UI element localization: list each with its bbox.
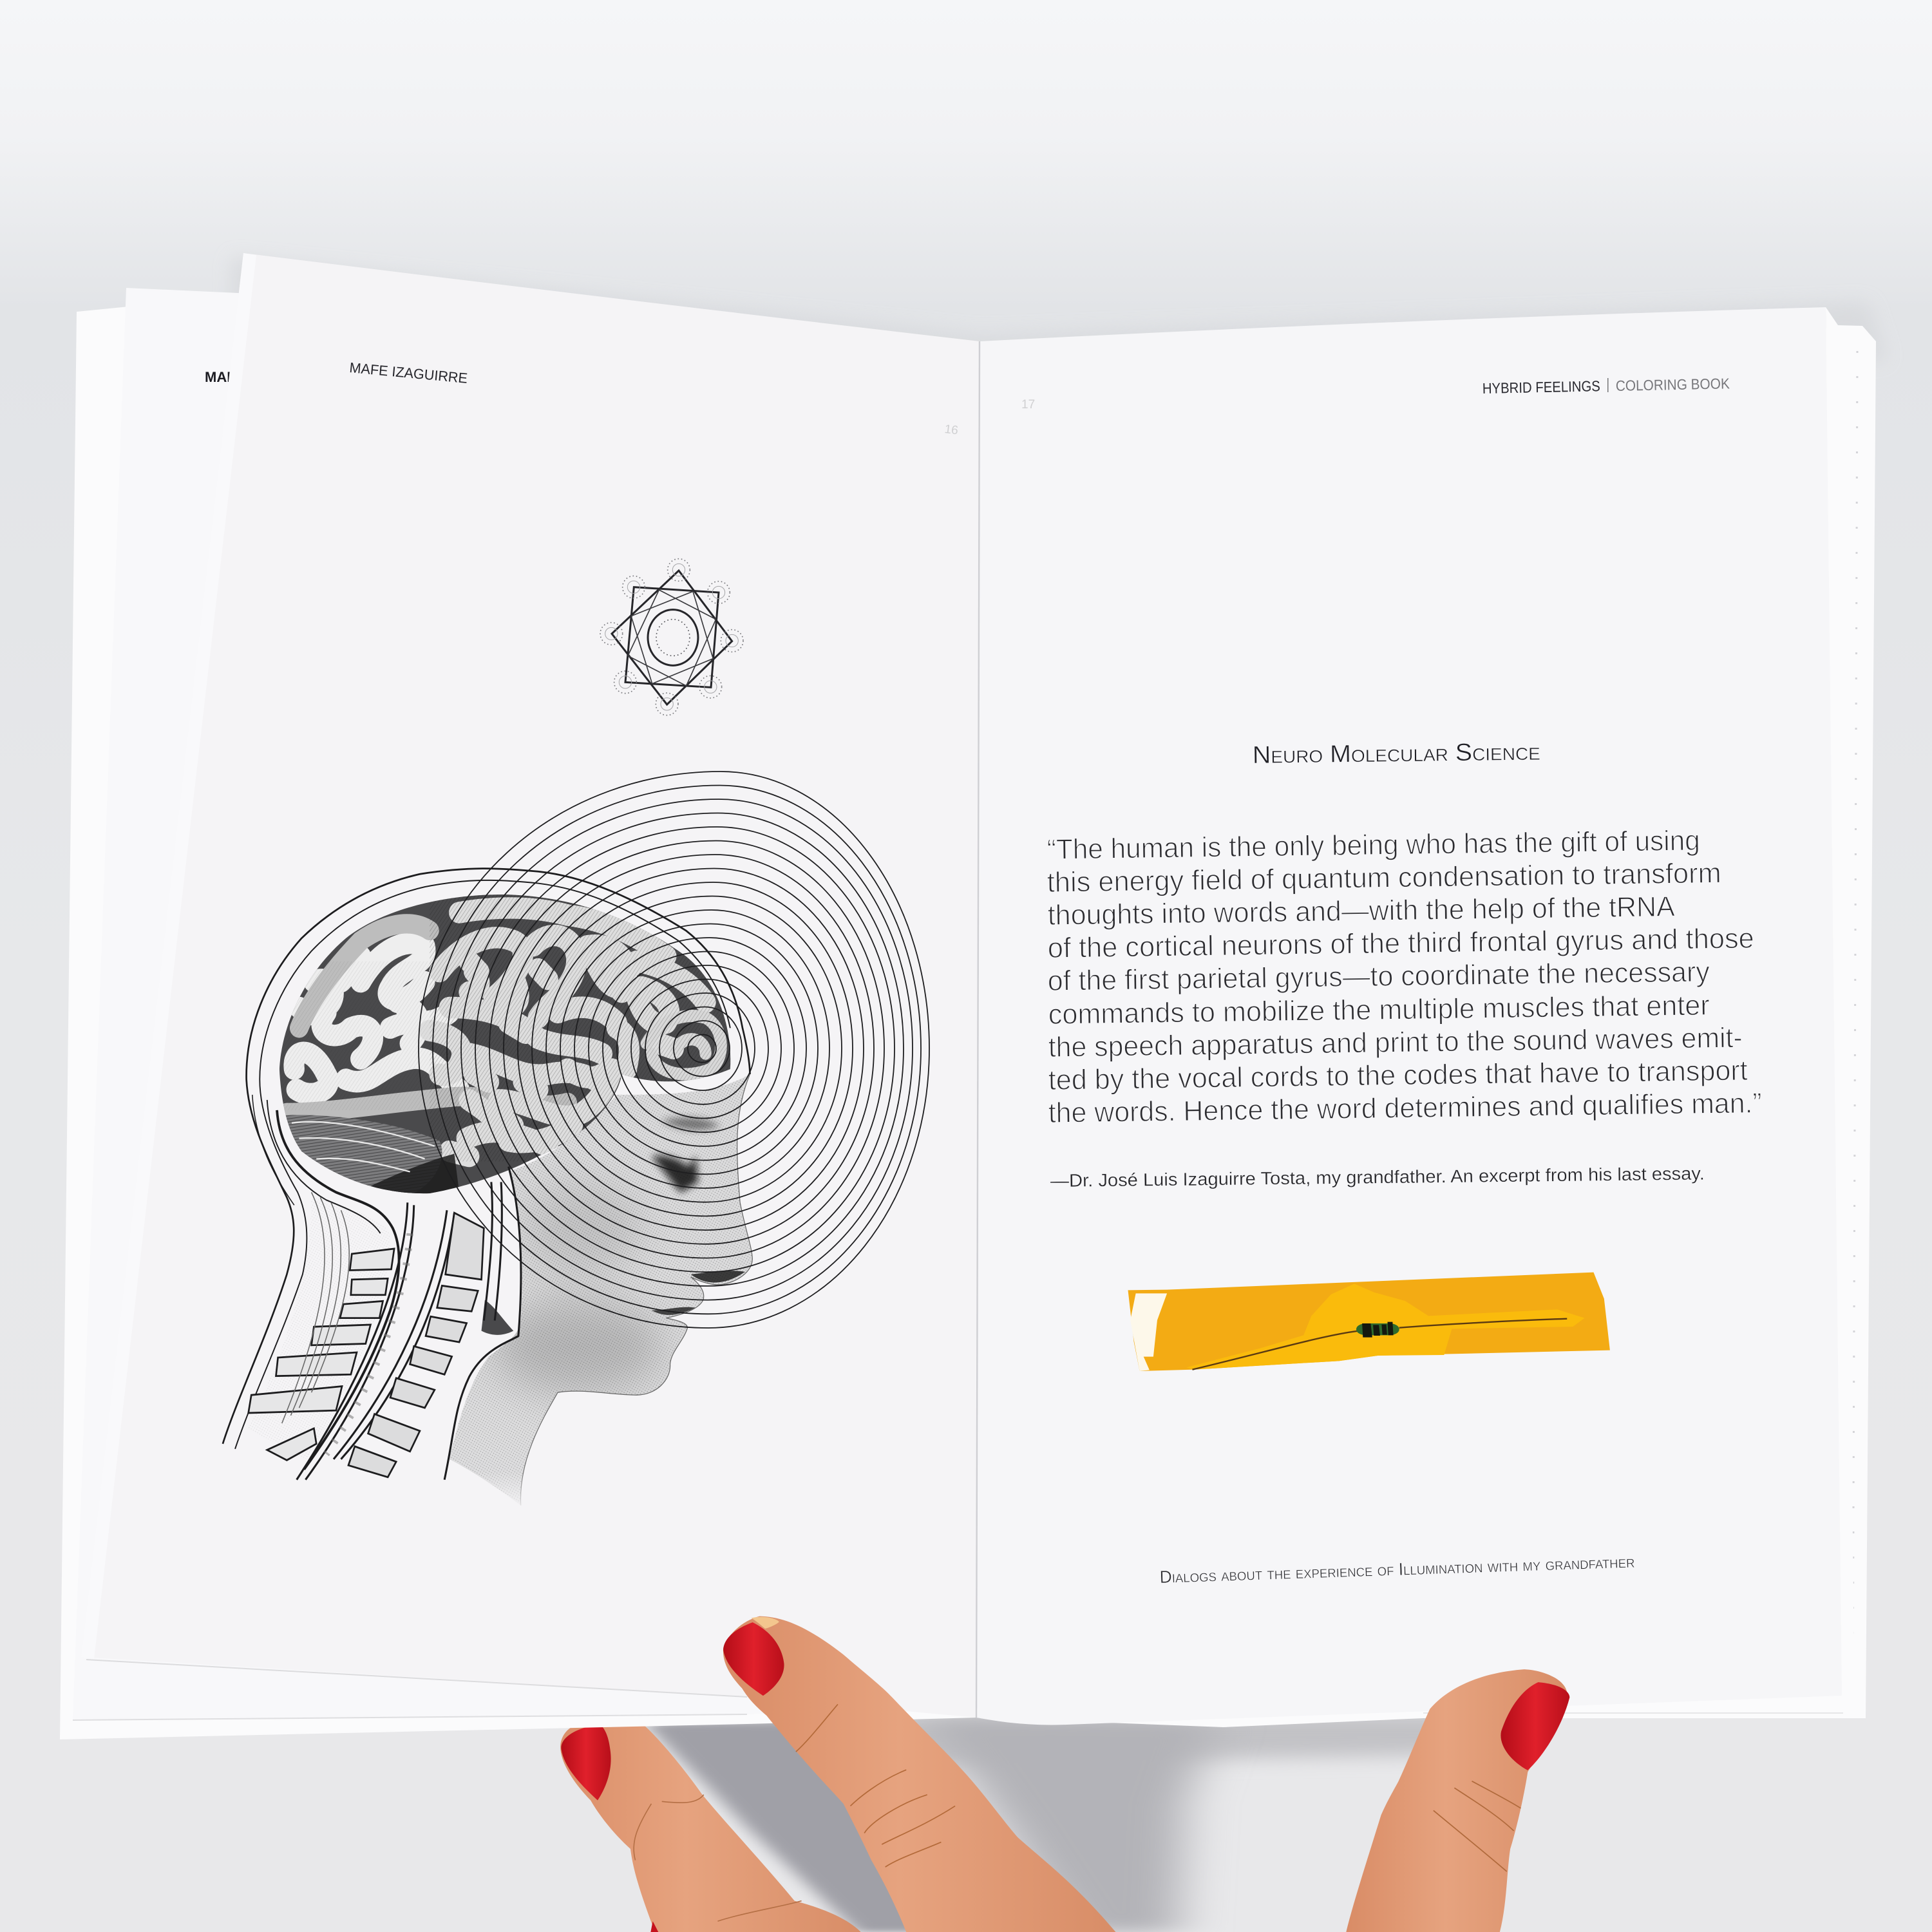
hand: fingers over the book (723, 1616, 1569, 1932)
quote text block: commands to mobilize the multiple muscles that enter (1048, 990, 1710, 1030)
inner star lines (628, 590, 716, 686)
running head: left: MAFE IZAGUIRRE (349, 359, 468, 386)
quote text block: of the first parietal gyrus—to coordinate the necessary (1047, 956, 1710, 997)
jaw and neck shading (494, 1300, 661, 1392)
brain (279, 895, 730, 1194)
spinal dots (327, 1233, 410, 1454)
yellow tape with resistor (1128, 1273, 1610, 1371)
running head divider (1607, 378, 1609, 392)
nail: left finger (561, 1727, 611, 1801)
cerebellum (285, 1115, 459, 1198)
icon: octagram mandala (600, 559, 743, 715)
left page bottom edge (86, 1660, 747, 1697)
nail: peeking fourth finger (650, 1921, 658, 1932)
gyri: frontal spiral (647, 1016, 721, 1074)
sheet edge line (73, 1714, 747, 1720)
hand: fingers under and shadows (543, 1720, 1213, 1932)
nail: centre finger (723, 1622, 784, 1696)
large squares (612, 571, 732, 705)
quote text block: of the cortical neurons of the third frontal gyrus and those (1047, 923, 1754, 964)
glue patch (1186, 1283, 1585, 1370)
brain hatching (430, 895, 735, 1162)
creases: centre finger (796, 1704, 955, 1867)
creases: right finger (1434, 1781, 1520, 1871)
running head: partly hidden page: MAFE (205, 369, 245, 385)
corner circles (605, 564, 738, 710)
soft shadow around the book (232, 258, 1887, 361)
spinal channel (297, 1167, 521, 1480)
vertebrae: front column (348, 1213, 484, 1477)
running head book title: HYBRID FEELINGS (1482, 377, 1600, 397)
quote text block: this energy field of quantum condensation to transform (1046, 857, 1721, 898)
brain dark base (279, 895, 730, 1194)
nail tip (751, 1617, 779, 1629)
wire (1192, 1319, 1567, 1370)
shadow under the book (644, 1713, 1481, 1768)
book: right stacked pages (976, 307, 1876, 1727)
tape strip (1128, 1273, 1610, 1371)
page number: right: 17 (1021, 398, 1035, 412)
dotted inner circle (656, 620, 690, 656)
sheet: middle (73, 288, 976, 1720)
gyri: rear lobe (294, 943, 459, 1094)
finger shadow: right of centre finger (927, 1720, 1213, 1932)
illustration: anatomical head cross-section (223, 869, 752, 1511)
quote text block: the words. Hence the word determines and qualifies man.” (1048, 1088, 1762, 1129)
sheet: lowest (60, 307, 980, 1739)
quote text block: ted by the vocal cords to the codes that have to transport (1048, 1055, 1748, 1096)
neck fade (439, 1382, 567, 1511)
brain rear hatching (279, 961, 430, 1110)
creases: left finger (634, 1795, 802, 1921)
finger shadow: between fingers (648, 1723, 1074, 1932)
footer line: Dialogs about the experience of Illumination with my grandfather (1159, 1552, 1635, 1587)
quote text block: “The human is the only being who has the gift of using (1046, 825, 1700, 866)
cheek shading (524, 1182, 641, 1274)
quote text block: thoughts into words and—with the help of the tRNA (1047, 891, 1676, 931)
stitch dots (1853, 351, 1857, 1707)
finger: left (543, 1723, 861, 1932)
corner dotted circles (600, 559, 743, 715)
neck muscle lines (282, 1192, 349, 1423)
spine fold (976, 341, 980, 1718)
left page fore edge strip (81, 253, 256, 1659)
vertebrae: rear column (249, 1249, 394, 1460)
eyebrow (661, 1118, 721, 1130)
resistor (1356, 1322, 1399, 1338)
eye (651, 1156, 698, 1192)
neck tissue tone (247, 1197, 390, 1459)
finger: centre (723, 1616, 1115, 1932)
right page sheet (976, 307, 1842, 1725)
nail: right finger (1501, 1682, 1569, 1770)
upper stitch dots (1827, 325, 1830, 483)
gyri: upper greyer band (287, 923, 567, 1113)
profile contour (520, 1074, 752, 1506)
gyri: central lobes (430, 908, 706, 1157)
right page block (976, 325, 1876, 1727)
left page sheet (81, 253, 980, 1718)
tape highlight (1130, 1293, 1167, 1371)
finger: right (1346, 1669, 1567, 1932)
concentric rings (419, 772, 929, 1328)
page edge strip (1826, 307, 1855, 1700)
left page (81, 253, 980, 1718)
skull layers (223, 869, 750, 1470)
heading: Neuro Molecular Science (1253, 739, 1540, 769)
running head: right (1482, 375, 1730, 397)
right page (976, 307, 1842, 1725)
quote text block (1046, 825, 1762, 1129)
throat shadow (482, 1300, 513, 1335)
lips (651, 1307, 696, 1315)
book: back left sheets (60, 288, 980, 1739)
running head subtitle: COLORING BOOK (1616, 375, 1730, 394)
face and neck tone (439, 1074, 752, 1511)
page number: left: 16 (943, 422, 959, 438)
nostril (691, 1271, 745, 1283)
page edge lines (1423, 1712, 1843, 1714)
attribution: —Dr. José Luis Izaguirre Tosta, my grandfather. An excerpt from his last essay. (1050, 1163, 1705, 1191)
quote text block: the speech apparatus and print to the sound waves emit- (1048, 1022, 1743, 1063)
